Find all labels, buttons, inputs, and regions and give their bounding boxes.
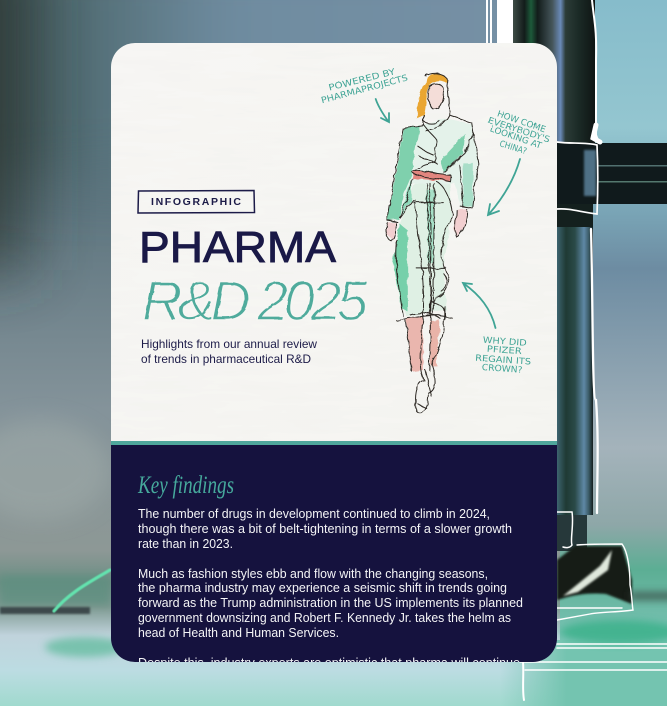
hands xyxy=(386,223,397,241)
subtitle: Highlights from our annual review xyxy=(141,337,317,351)
annotation: powered by Pharmaprojects: PHARMAPROJECTS xyxy=(320,73,410,106)
annotation: how come everybody's looking at China: HOW COME xyxy=(496,109,547,135)
legs xyxy=(406,317,423,372)
jacket colouring xyxy=(392,118,478,216)
title: R&D 2025: R&D 2025 xyxy=(142,269,369,332)
panel: key findings xyxy=(111,445,557,670)
title: Pharma: PHARMA xyxy=(139,223,337,272)
face xyxy=(428,84,444,109)
belt xyxy=(412,171,450,181)
subtitle: of trends in pharmaceutical R&D xyxy=(141,352,311,366)
text block: paragraph two xyxy=(138,566,523,640)
text block: paragraph one: The number of drugs in development continued to climb in 2024, xyxy=(138,506,490,521)
hair xyxy=(417,74,447,118)
annotation: why did Pfizer regain its crown xyxy=(476,336,530,373)
text block: paragraph one: rate than in 2023. xyxy=(138,536,233,551)
annotation: how come everybody's looking at China: CHINA? xyxy=(498,139,528,157)
annotation: powered by Pharmaprojects: POWERED BY xyxy=(328,67,397,94)
annotation: why did Pfizer regain its crown: WHY DID xyxy=(482,336,527,349)
machine foot xyxy=(557,546,632,604)
arrow: to figure from China note xyxy=(488,159,520,215)
text block: paragraph one: though there was a bit of belt-tightening in terms of a slower growth xyxy=(138,521,512,536)
label: infographic tag xyxy=(138,190,254,213)
machine column xyxy=(513,0,595,145)
panel: main card xyxy=(111,43,557,670)
annotation: why did Pfizer regain its crown: CROWN? xyxy=(481,363,523,376)
subtitle xyxy=(142,340,317,366)
text block: paragraph two: the pharma industry may experience a seismic shift in trends going xyxy=(138,580,507,595)
illustration: fashion sketch figure xyxy=(386,74,478,412)
annotation: why did Pfizer regain its crown: REGAIN ITS xyxy=(475,354,532,368)
text block: paragraph three, clipped: Despite this, industry experts are optimistic that pharma will continue xyxy=(138,655,520,670)
panel: paper header xyxy=(111,43,557,441)
arrow: to figure from Pharmaprojects note xyxy=(376,99,389,122)
text block: paragraph two: government downsizing and Robert F. Kennedy Jr. takes the helm as xyxy=(138,610,511,625)
annotation: how come everybody's looking at China: EVERYBODY'S xyxy=(486,116,552,146)
text block: paragraph two: forward as the Trump administration in the US implements its planned xyxy=(138,595,523,610)
text block: paragraph two: head of Health and Human Services. xyxy=(138,625,339,640)
crossbar xyxy=(557,143,667,204)
divider: teal band xyxy=(111,441,557,445)
heading: key findings: Key findings xyxy=(137,472,234,499)
ink lines xyxy=(386,74,478,412)
annotation: how come everybody's looking at China: LOOKING AT xyxy=(488,124,543,152)
arrow: to figure from Pfizer note xyxy=(463,283,496,328)
annotation: how come everybody's looking at China xyxy=(488,110,550,154)
white sketched outlines xyxy=(487,0,667,700)
green thread xyxy=(54,570,110,611)
annotation: why did Pfizer regain its crown: PFIZER xyxy=(486,345,522,357)
annotation: powered by Pharmaprojects xyxy=(321,68,408,104)
text block: paragraph two: Much as fashion styles ebb and flow with the changing seasons, xyxy=(138,566,488,581)
label: infographic tag: INFOGRAPHIC xyxy=(151,196,241,208)
text block: paragraph one xyxy=(138,508,512,548)
